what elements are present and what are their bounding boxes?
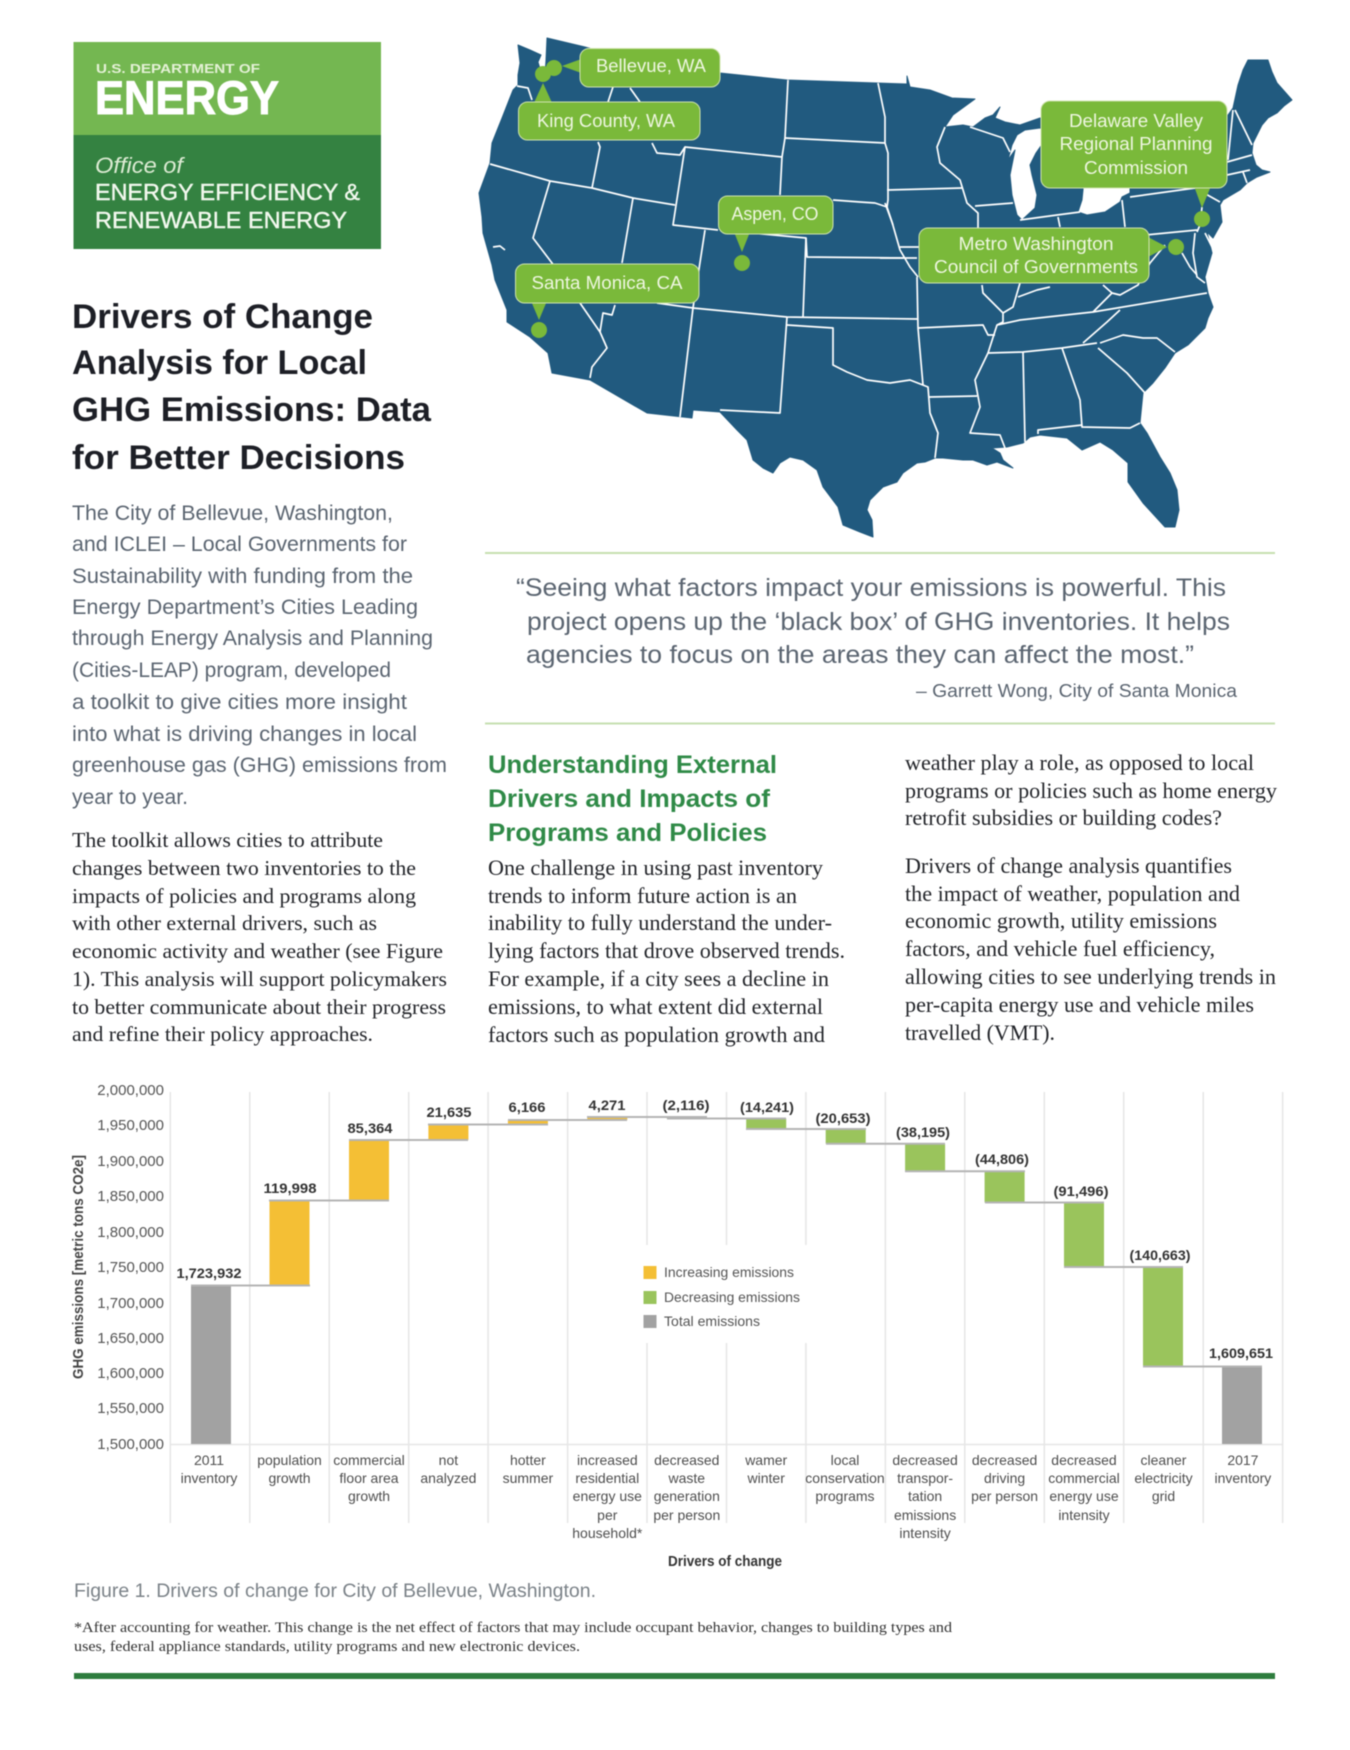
column 2 body text: the impact of weather, population and bbox=[905, 881, 1240, 906]
y axis labels: 1,700,000 bbox=[97, 1295, 164, 1312]
column 2 body text: weather play a role, as opposed to local bbox=[905, 750, 1254, 775]
value labels: 6,166 bbox=[508, 1099, 546, 1115]
y axis labels: 1,950,000 bbox=[97, 1117, 164, 1134]
intro paragraph: a toolkit to give cities more insight bbox=[72, 691, 407, 714]
bottom green bar bbox=[74, 1673, 1275, 1679]
pull quote: agencies to focus on the areas they can affect the most.” bbox=[526, 641, 1194, 669]
column 2 body text: per-capita energy use and vehicle miles bbox=[905, 992, 1254, 1017]
callout: Aspen, CO: Aspen, CO bbox=[732, 204, 818, 224]
intro paragraph: through Energy Analysis and Planning bbox=[72, 627, 433, 650]
category labels: driving bbox=[984, 1470, 1025, 1486]
column 2 body text: retrofit subsidies or building codes? bbox=[905, 805, 1222, 830]
y axis labels: 1,650,000 bbox=[97, 1330, 164, 1347]
toolkit paragraph: changes between two inventories to the bbox=[72, 856, 416, 880]
legend: Increasing emissions bbox=[664, 1264, 794, 1280]
category labels: decreased bbox=[654, 1452, 719, 1468]
value labels: 1,723,932 bbox=[176, 1265, 242, 1281]
legend bbox=[644, 1264, 800, 1329]
intro paragraph: and ICLEI – Local Governments for bbox=[72, 533, 407, 556]
category labels: decreased bbox=[972, 1452, 1037, 1468]
y axis labels: 1,800,000 bbox=[97, 1224, 164, 1241]
category labels: residential bbox=[575, 1470, 639, 1486]
column 1 body text: lying factors that drove observed trends. bbox=[488, 938, 845, 963]
value labels: (38,195) bbox=[896, 1124, 950, 1140]
callout: Delaware Valley Regional Planning Commission: Regional Planning bbox=[1060, 134, 1212, 154]
callout: Aspen, CO bbox=[718, 196, 833, 271]
toolkit paragraph: and refine their policy approaches. bbox=[72, 1022, 373, 1046]
logo: U.S. Department of Energy bbox=[74, 42, 381, 249]
toolkit paragraph: economic activity and weather (see Figure bbox=[72, 939, 443, 963]
callout: Santa Monica, CA bbox=[516, 264, 699, 338]
logo: U.S. Department of Energy: RENEWABLE ENERGY bbox=[95, 207, 347, 233]
category labels: analyzed bbox=[420, 1470, 476, 1486]
title: Drivers of Change bbox=[72, 298, 373, 336]
value labels: (20,653) bbox=[816, 1110, 870, 1126]
y axis labels: 2,000,000 bbox=[97, 1082, 164, 1099]
column 1 body text: For example, if a city sees a decline in bbox=[488, 966, 829, 991]
logo: U.S. Department of Energy: U.S. DEPARTMENT OF bbox=[96, 61, 260, 76]
y axis labels bbox=[97, 1082, 164, 1453]
category labels: per person bbox=[971, 1488, 1038, 1504]
y axis labels: 1,550,000 bbox=[97, 1400, 164, 1417]
category labels: growth bbox=[268, 1470, 311, 1486]
footnote: *After accounting for weather. This change is the net effect of factors that may include occupant behavior, changes to building types and bbox=[74, 1620, 953, 1636]
category labels: population bbox=[257, 1452, 322, 1468]
column 2 body text: economic growth, utility emissions bbox=[905, 908, 1217, 933]
y axis title: GHG emissions [metric tons CO2e] bbox=[71, 1155, 87, 1379]
category labels bbox=[181, 1452, 1271, 1541]
category labels: generation bbox=[654, 1488, 720, 1504]
category labels: household* bbox=[572, 1525, 643, 1541]
logo: U.S. Department of Energy: Office of bbox=[95, 153, 186, 178]
title: GHG Emissions: Data bbox=[72, 391, 432, 429]
column 2 body text: factors, and vehicle fuel efficiency, bbox=[905, 936, 1215, 961]
value labels: (14,241) bbox=[740, 1099, 794, 1115]
title: for Better Decisions bbox=[72, 439, 405, 477]
value labels: 1,609,651 bbox=[1209, 1345, 1273, 1361]
intro paragraph: Energy Department’s Cities Leading bbox=[72, 596, 418, 619]
waterfall chart: drivers of change bbox=[71, 1082, 1283, 1570]
y axis labels: 1,750,000 bbox=[97, 1259, 164, 1276]
column 1 body text: inability to fully understand the under- bbox=[488, 910, 832, 935]
x axis title: Drivers of change bbox=[668, 1554, 782, 1570]
callout: Delaware Valley Regional Planning Commission: Commission bbox=[1084, 158, 1188, 178]
column 1 body text: One challenge in using past inventory bbox=[488, 855, 823, 880]
value labels: 21,635 bbox=[426, 1104, 472, 1120]
bars bbox=[191, 1117, 1262, 1444]
value labels: (140,663) bbox=[1130, 1247, 1190, 1263]
pull quote: “Seeing what factors impact your emissions is powerful. This bbox=[516, 574, 1226, 602]
intro paragraph bbox=[72, 502, 447, 809]
value labels: 85,364 bbox=[348, 1120, 393, 1136]
toolkit paragraph: to better communicate about their progress bbox=[72, 995, 446, 1019]
pull quote: project opens up the ‘black box’ of GHG inventories. It helps bbox=[527, 608, 1230, 636]
category labels: hotter bbox=[510, 1452, 546, 1468]
callout: Delaware Valley Regional Planning Commission bbox=[1041, 101, 1227, 227]
logo: U.S. Department of Energy: ENERGY bbox=[95, 71, 279, 124]
intro paragraph: year to year. bbox=[72, 786, 188, 809]
category labels: wamer bbox=[744, 1452, 788, 1468]
category labels: waste bbox=[668, 1470, 705, 1486]
intro paragraph: greenhouse gas (GHG) emissions from bbox=[72, 754, 447, 777]
pull quote bbox=[516, 574, 1238, 701]
callout: Bellevue, WA bbox=[546, 48, 720, 87]
category labels: tation bbox=[908, 1488, 942, 1504]
heading: Understanding External Drivers: Drivers and Impacts of bbox=[488, 785, 771, 813]
legend: Total emissions bbox=[664, 1313, 760, 1329]
category labels: summer bbox=[503, 1470, 554, 1486]
category labels: grid bbox=[1152, 1488, 1175, 1504]
category labels: inventory bbox=[181, 1470, 237, 1486]
callout: Delaware Valley Regional Planning Commission: Delaware Valley bbox=[1069, 111, 1203, 131]
value labels: 119,998 bbox=[264, 1180, 317, 1196]
toolkit paragraph: with other external drivers, such as bbox=[72, 911, 377, 935]
category labels: cleaner bbox=[1141, 1452, 1187, 1468]
heading: Understanding External Drivers: Programs and Policies bbox=[488, 819, 767, 847]
category labels: energy use bbox=[573, 1488, 642, 1504]
column 1 body text: factors such as population growth and bbox=[488, 1022, 825, 1047]
title bbox=[72, 298, 432, 477]
column 2 body text: allowing cities to see underlying trends in bbox=[905, 964, 1276, 989]
column 2 body text bbox=[905, 750, 1277, 1045]
intro paragraph: Sustainability with funding from the bbox=[72, 565, 413, 588]
category labels: emissions bbox=[894, 1507, 956, 1523]
category labels: programs bbox=[815, 1488, 875, 1504]
toolkit paragraph: 1). This analysis will support policymakers bbox=[72, 967, 447, 991]
column 1 body text bbox=[488, 855, 845, 1047]
value labels bbox=[176, 1097, 1273, 1361]
category labels: energy use bbox=[1049, 1488, 1119, 1504]
category labels: per bbox=[597, 1507, 618, 1523]
category labels: local bbox=[831, 1452, 859, 1468]
callout: King County, WA: King County, WA bbox=[537, 111, 675, 131]
value labels: (2,116) bbox=[662, 1097, 710, 1113]
category labels: per person bbox=[653, 1507, 720, 1523]
column 1 body text: emissions, to what extent did external bbox=[488, 994, 823, 1019]
heading: Understanding External Drivers bbox=[488, 751, 777, 847]
category labels: 2017 bbox=[1227, 1452, 1259, 1468]
figure caption: Figure 1. Drivers of change for City of Bellevue, Washington. bbox=[74, 1581, 596, 1602]
category labels: commercial bbox=[333, 1452, 405, 1468]
category labels: intensity bbox=[1058, 1507, 1110, 1523]
category labels: winter bbox=[747, 1470, 785, 1486]
callout: Metro Washington Council of Governments: Council of Governments bbox=[934, 257, 1138, 277]
y axis labels: 1,600,000 bbox=[97, 1365, 164, 1382]
y axis labels: 1,900,000 bbox=[97, 1153, 164, 1170]
callout: Santa Monica, CA: Santa Monica, CA bbox=[532, 273, 682, 293]
callout: Bellevue, WA: Bellevue, WA bbox=[596, 56, 706, 76]
intro paragraph: (Cities-LEAP) program, developed bbox=[72, 659, 391, 682]
category labels: growth bbox=[348, 1488, 390, 1504]
category labels: increased bbox=[577, 1452, 638, 1468]
footnote: uses, federal appliance standards, utility programs and new electronic devices. bbox=[74, 1639, 580, 1655]
category labels: 2011 bbox=[194, 1452, 224, 1468]
category labels: floor area bbox=[339, 1470, 399, 1486]
callout: Metro Washington Council of Governments bbox=[919, 228, 1184, 283]
pull quote: – Garrett Wong, City of Santa Monica bbox=[916, 681, 1238, 701]
map: contiguous United States bbox=[479, 38, 1292, 537]
title: Analysis for Local bbox=[72, 344, 367, 382]
heading: Understanding External Drivers: Understanding External bbox=[488, 751, 777, 779]
column 1 body text: trends to inform future action is an bbox=[488, 883, 797, 908]
intro paragraph: The City of Bellevue, Washington, bbox=[72, 502, 393, 525]
toolkit paragraph: impacts of policies and programs along bbox=[72, 884, 416, 908]
column 2 body text: Drivers of change analysis quantifies bbox=[905, 853, 1232, 878]
logo: U.S. Department of Energy: ENERGY EFFICIENCY & bbox=[95, 179, 360, 205]
value labels: 4,271 bbox=[588, 1097, 626, 1113]
callout: King County, WA bbox=[518, 66, 700, 140]
y axis labels: 1,850,000 bbox=[97, 1188, 164, 1205]
legend: Decreasing emissions bbox=[664, 1289, 800, 1305]
category labels: conservation bbox=[805, 1470, 885, 1486]
category labels: commercial bbox=[1048, 1470, 1120, 1486]
category labels: inventory bbox=[1214, 1470, 1271, 1486]
category labels: decreased bbox=[892, 1452, 958, 1468]
footnote bbox=[74, 1620, 953, 1655]
category labels: transpor- bbox=[897, 1470, 953, 1486]
column 2 body text: programs or policies such as home energy bbox=[905, 778, 1277, 803]
category labels: electricity bbox=[1134, 1470, 1193, 1486]
category labels: intensity bbox=[899, 1525, 951, 1541]
callout: Metro Washington Council of Governments: Metro Washington bbox=[958, 234, 1114, 254]
toolkit paragraph bbox=[72, 828, 447, 1046]
value labels: (91,496) bbox=[1054, 1183, 1108, 1199]
value labels: (44,806) bbox=[975, 1151, 1029, 1167]
toolkit paragraph: The toolkit allows cities to attribute bbox=[72, 828, 383, 852]
category labels: not bbox=[439, 1452, 458, 1468]
category labels: decreased bbox=[1051, 1452, 1117, 1468]
y axis labels: 1,500,000 bbox=[97, 1436, 164, 1453]
intro paragraph: into what is driving changes in local bbox=[72, 723, 417, 746]
column 2 body text: travelled (VMT). bbox=[905, 1020, 1055, 1045]
